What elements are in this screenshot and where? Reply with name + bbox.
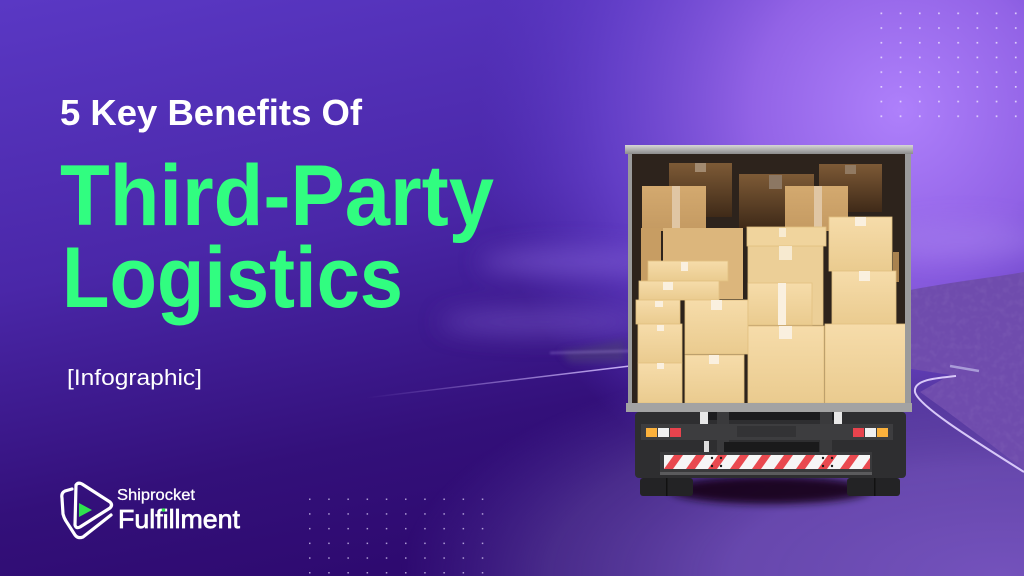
- side posts: [628, 152, 911, 406]
- reflective bumper: [660, 452, 872, 472]
- dot grid bottom: [309, 498, 486, 576]
- middle cartons: [641, 186, 899, 299]
- logo: Shiprocket Fulfillment: Fulfillment: [118, 504, 241, 534]
- truck: [625, 145, 913, 504]
- icon: play triangles: [62, 483, 112, 538]
- wordmark: Shiprocket: [117, 487, 196, 504]
- background scene: clouds, hill and road: [365, 222, 1024, 576]
- subtitle: [Infographic]: [Infographic]: [67, 365, 202, 390]
- logo: Shiprocket Fulfillment: [62, 483, 241, 538]
- floor sill: [626, 403, 912, 412]
- guard rail: [950, 366, 979, 371]
- dot grid top right: [880, 12, 1020, 119]
- undercarriage: [635, 412, 906, 496]
- back cartons: [669, 163, 882, 228]
- cargo interior: [632, 154, 905, 404]
- title: Third-Party Logistics: [60, 148, 494, 326]
- road edge line right: [915, 376, 1024, 472]
- wheels: [640, 478, 693, 496]
- front cartons: [636, 217, 906, 403]
- light bar: [641, 424, 893, 440]
- carton tape: [655, 217, 870, 369]
- roof rail: [625, 145, 913, 154]
- hill: [905, 272, 1024, 470]
- road surface: [400, 345, 1024, 576]
- ground shadow: [670, 476, 870, 504]
- title: Third-Party Logistics: Third-Party: [60, 148, 494, 244]
- road edge line left: [365, 366, 630, 398]
- tail lights left: [646, 428, 657, 437]
- tail lights right: [853, 428, 864, 437]
- heading: 5 Key Benefits Of: 5 Key Benefits Of: [60, 92, 363, 133]
- title: Third-Party Logistics: Logistics: [62, 230, 403, 326]
